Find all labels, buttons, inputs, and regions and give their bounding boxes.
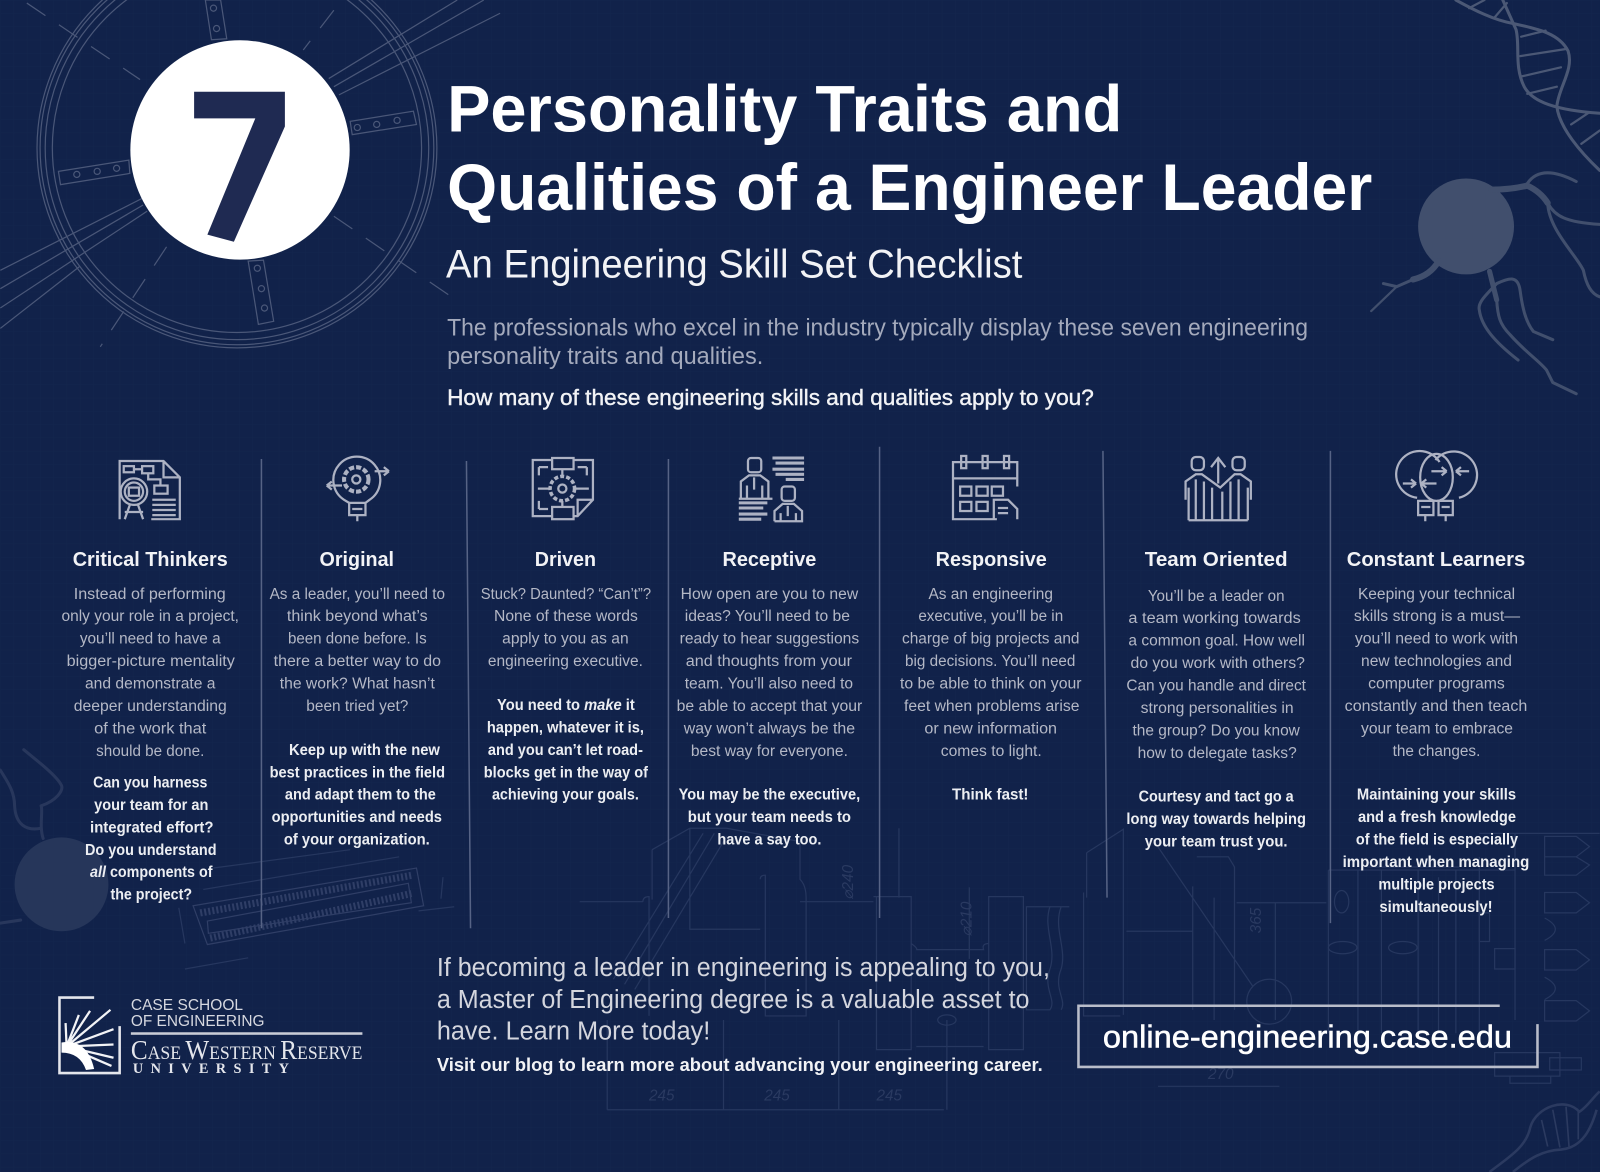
body text: of the work that: [94, 720, 207, 737]
website box: [1078, 1006, 1537, 1067]
body text: there a better way to do: [274, 653, 441, 670]
icon: two people with notes: [739, 458, 804, 521]
body text: Keeping your technical: [1358, 586, 1515, 603]
callout text: long way towards helping: [1126, 811, 1306, 828]
callout text: but your team needs to: [688, 809, 851, 826]
body text: been done before. Is: [288, 631, 427, 648]
body text: [1126, 588, 1307, 762]
body text: [481, 586, 651, 670]
intro paragraph: [447, 315, 1308, 370]
icon: two colleagues and arrow: [1186, 457, 1251, 520]
call to action text: [437, 954, 1050, 1045]
body text: the work? What hasn’t: [280, 676, 435, 693]
callout text: your team for an: [94, 797, 208, 814]
body text: bigger-picture mentality: [67, 653, 235, 670]
title: Personality Traits and: [447, 73, 1122, 147]
callout text: of the field is especially: [1356, 832, 1518, 849]
panel: Driven: [481, 458, 651, 804]
panel: Constant Learners: [1343, 451, 1529, 916]
callout text: best practices in the field: [270, 764, 445, 781]
body text: As an engineering: [929, 586, 1053, 603]
callout text: the project?: [110, 887, 192, 904]
body text: to be able to think on your: [900, 676, 1082, 693]
website box: online-engineering.case.edu: [1103, 1019, 1512, 1055]
blueprint machine drawing: [580, 828, 1600, 1110]
heading: Receptive: [722, 549, 816, 571]
intro paragraph: The professionals who excel in the industry typically display these seven engineering: [447, 315, 1308, 342]
body text: big decisions. You’ll need: [905, 653, 1075, 670]
body text: [1345, 586, 1527, 760]
panel: Team Oriented: [1126, 457, 1307, 851]
call to action text: have. Learn More today!: [437, 1017, 710, 1045]
callout text: You need to make it: [497, 697, 635, 714]
callout text: Courtesy and tact go a: [1139, 789, 1294, 806]
neuron bottom left: [0, 750, 108, 931]
body text: team. You’ll also need to: [685, 676, 853, 693]
body text: you’ll need to work with: [1355, 631, 1518, 648]
icon: calendar and document: [953, 456, 1017, 519]
body text: best way for everyone.: [691, 743, 848, 760]
heading: Responsive: [936, 549, 1047, 571]
body text: executive, you’ll be in: [918, 608, 1063, 625]
body text: [677, 586, 862, 760]
school name: OF ENGINEERING: [131, 1013, 264, 1030]
heading: Driven: [535, 549, 596, 571]
body text: [270, 586, 445, 715]
body text: how to delegate tasks?: [1138, 745, 1297, 762]
body text: Stuck? Daunted? “Can’t”?: [481, 586, 651, 603]
blueprint machine drawing: 245: [763, 1088, 790, 1105]
blog link text: Visit our blog to learn more about advancing your engineering career.: [437, 1054, 1043, 1075]
callout text: multiple projects: [1378, 876, 1495, 893]
body text: think beyond what’s: [287, 608, 428, 625]
icon: blueprint gear: [533, 458, 593, 519]
callout text: have a say too.: [717, 832, 821, 849]
body text: Can you handle and direct: [1126, 678, 1307, 695]
body text: Instead of performing: [74, 586, 226, 603]
intro paragraph: personality traits and qualities.: [447, 343, 763, 370]
callout text: [85, 774, 217, 904]
DNA strand bottom right: [1490, 1091, 1600, 1172]
icon: gear lightbulb: [327, 457, 389, 521]
university name: CASE WESTERN RESERVE: [131, 1034, 362, 1065]
heading: Critical Thinkers: [73, 549, 228, 571]
body text: deeper understanding: [74, 698, 227, 715]
neuron top right: [1371, 173, 1600, 394]
callout text: integrated effort?: [90, 819, 213, 836]
title: [447, 73, 1372, 225]
heading: Original: [320, 549, 394, 571]
callout text: Maintaining your skills: [1357, 787, 1516, 804]
body text: a common goal. How well: [1128, 633, 1305, 650]
panel: Responsive: [900, 456, 1082, 804]
heading: Team Oriented: [1145, 549, 1288, 571]
callout text: You may be the executive,: [679, 787, 860, 804]
body text: strong personalities in: [1141, 700, 1294, 717]
body text: comes to light.: [941, 743, 1042, 760]
body text: and demonstrate a: [85, 676, 216, 693]
callout text: [1126, 789, 1306, 851]
icon: sunburst frame: [59, 998, 120, 1073]
body text: computer programs: [1368, 676, 1505, 693]
body text: [900, 586, 1082, 760]
body text: only your role in a project,: [62, 608, 239, 625]
call to action text: If becoming a leader in engineering is appealing to you,: [437, 954, 1050, 982]
body text: the changes.: [1393, 743, 1480, 760]
callout text: your team trust you.: [1145, 834, 1288, 851]
callout text: Do you understand: [85, 842, 217, 859]
callout text: and adapt them to the: [285, 787, 436, 804]
body text: ready to hear suggestions: [680, 631, 859, 648]
column dividers: [261, 447, 1330, 928]
title: Qualities of a Engineer Leader: [447, 151, 1372, 225]
callout text: opportunities and needs: [272, 809, 442, 826]
callout text: [270, 742, 445, 849]
callout text: blocks get in the way of: [484, 764, 649, 781]
blueprint wheel: [0, 0, 500, 348]
body text: constantly and then teach: [1345, 698, 1527, 715]
blueprint machine drawing: 365: [1248, 907, 1265, 933]
callout text: simultaneously!: [1379, 899, 1493, 916]
icon: document with magnifier: [120, 461, 180, 519]
callout text: happen, whatever it is,: [487, 719, 644, 736]
body text: way won’t always be the: [683, 720, 855, 737]
body text: apply to you as an: [502, 631, 629, 648]
blueprint bar drawing: [179, 850, 454, 969]
callout text: and a fresh knowledge: [1358, 809, 1516, 826]
callout text: of your organization.: [284, 832, 430, 849]
school name: [131, 997, 264, 1030]
body text: be able to accept that your: [677, 698, 862, 715]
blueprint machine drawing: 245: [876, 1088, 903, 1105]
body text: do you work with others?: [1130, 655, 1305, 672]
heading: Constant Learners: [1347, 549, 1525, 571]
body text: been tried yet?: [306, 698, 409, 715]
blueprint machine drawing: 270: [1207, 1066, 1234, 1083]
body text: charge of big projects and: [902, 631, 1079, 648]
body text: new technologies and: [1361, 653, 1512, 670]
blueprint machine drawing: ⌀240: [840, 864, 857, 900]
body text: ideas? You’ll need to be: [685, 608, 850, 625]
callout text: achieving your goals.: [492, 787, 639, 804]
panel: Critical Thinkers: [62, 461, 239, 904]
callout text: important when managing: [1343, 854, 1529, 871]
body text: should be done.: [96, 743, 204, 760]
subtitle: An Engineering Skill Set Checklist: [446, 242, 1022, 286]
intro question: How many of these engineering skills and qualities apply to you?: [447, 385, 1094, 410]
callout text: and you can’t let road-: [488, 742, 643, 759]
body text: a team working towards: [1128, 610, 1301, 627]
callout text: Keep up with the new: [289, 742, 441, 759]
callout text: Can you harness: [93, 774, 208, 791]
body text: you’ll need to have a: [80, 631, 221, 648]
callout text: [1343, 787, 1529, 916]
panel: Original: [270, 457, 445, 849]
body text: As a leader, you’ll need to: [270, 586, 445, 603]
blueprint machine drawing: 245: [648, 1088, 675, 1105]
body text: engineering executive.: [488, 653, 643, 670]
blueprint machine drawing: ⌀210: [958, 901, 975, 936]
callout text: all components of: [90, 864, 213, 881]
body text: skills strong is a must—: [1354, 608, 1520, 625]
panel: Receptive: [677, 458, 862, 849]
callout text: Think fast!: [952, 787, 1028, 804]
icon: overlapping circles and servers: [1396, 451, 1477, 521]
body text: You’ll be a leader on: [1148, 588, 1285, 605]
number badge: [130, 40, 350, 260]
body text: the group? Do you know: [1133, 722, 1300, 739]
university name: UNIVERSITY: [133, 1061, 290, 1077]
body text: your team to embrace: [1361, 720, 1513, 737]
callout text: [679, 787, 860, 849]
call to action text: a Master of Engineering degree is a valuable asset to: [437, 986, 1030, 1014]
school name: CASE SCHOOL: [131, 997, 243, 1014]
body text: feet when problems arise: [904, 698, 1080, 715]
body text: or new information: [924, 720, 1057, 737]
logo: Case Western Reserve University: [59, 997, 362, 1077]
body text: [62, 586, 239, 760]
callout text: [484, 697, 649, 804]
body text: How open are you to new: [681, 586, 859, 603]
DNA strand top right: [1456, 0, 1600, 170]
body text: None of these words: [494, 608, 638, 625]
body text: and thoughts from your: [686, 653, 852, 670]
